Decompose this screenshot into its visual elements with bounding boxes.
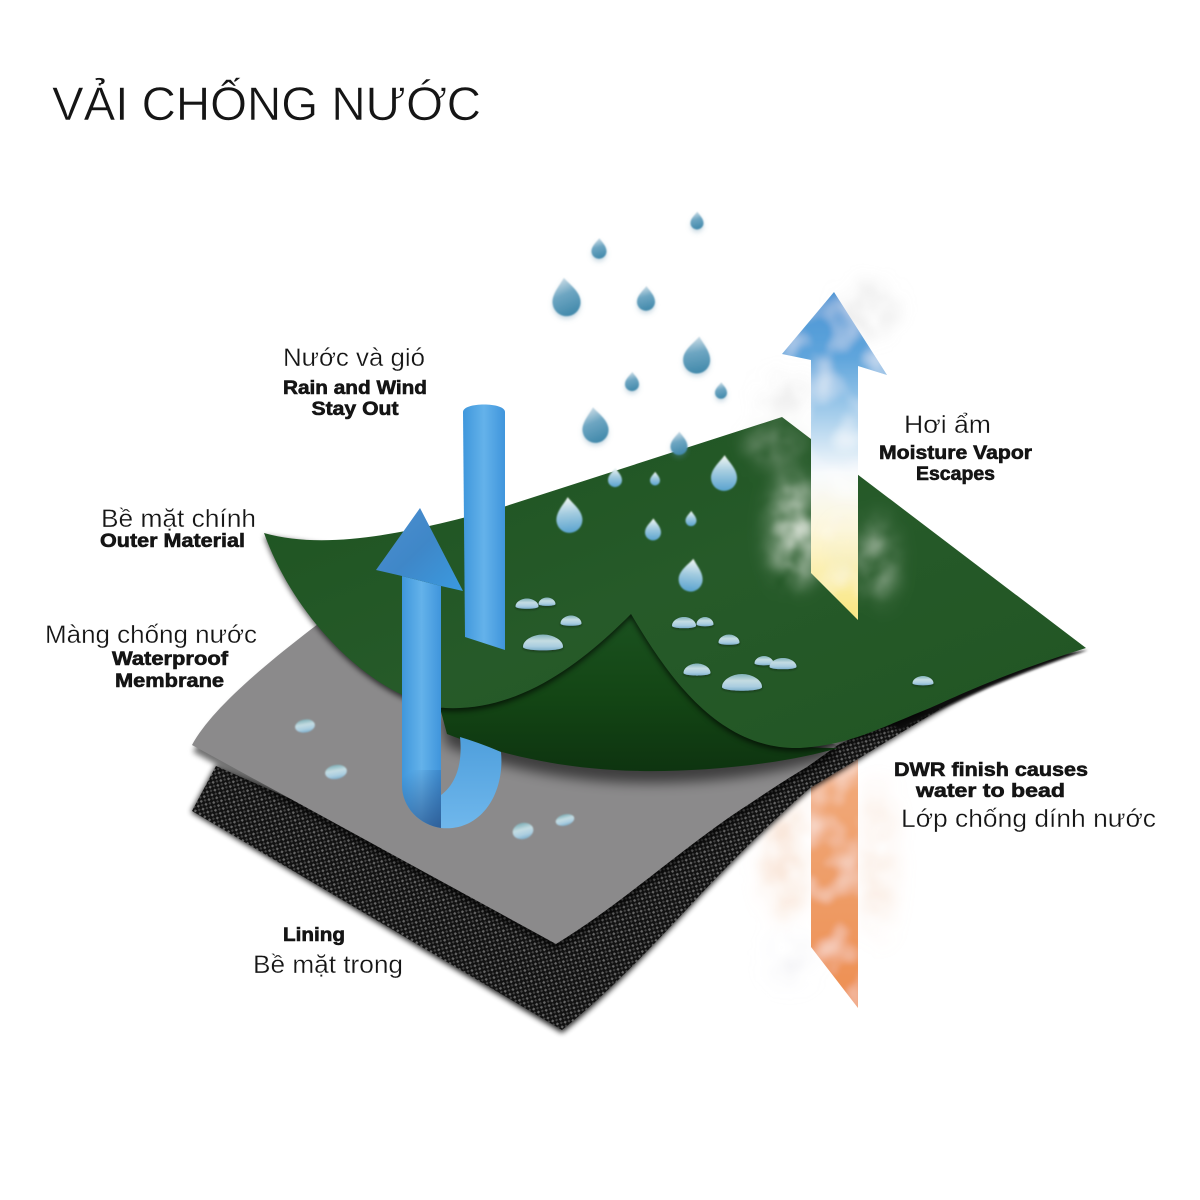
label: lining	[253, 925, 403, 979]
steam over vapor arrow	[833, 524, 857, 576]
label: rain and wind: Nước và gió	[283, 344, 425, 372]
fabric layer: waterproof membrane	[192, 624, 838, 950]
label: waterproof membrane: Màng chống nước	[45, 621, 257, 649]
orange heat haze	[761, 780, 894, 984]
arrow: orange heat beneath fabric	[811, 755, 858, 1008]
label: rain and wind: Stay Out	[312, 399, 399, 420]
label: DWR finish: DWR finish causes	[894, 760, 1088, 781]
label: waterproof membrane: Waterproof	[112, 649, 229, 670]
label: outer material: Bề mặt chính	[101, 505, 256, 533]
beaded water on outer material	[516, 598, 934, 691]
label: moisture vapor	[879, 411, 1033, 485]
label: waterproof membrane: Membrane	[115, 671, 224, 692]
fabric layer: outer material	[264, 417, 1086, 751]
steam behind vapor arrow	[747, 286, 896, 602]
falling water drops	[549, 212, 727, 455]
arrow: rain and wind stay out (deflected downward arrow)	[463, 404, 505, 650]
label: outer material: Outer Material	[100, 531, 245, 552]
arrow: water passing through membrane (J-shaped up arrow)	[376, 508, 501, 828]
arrow: moisture vapor escapes	[782, 292, 887, 620]
label: waterproof membrane	[45, 621, 257, 692]
label: lining: Bề mặt trong	[253, 951, 403, 979]
title: VẢI CHỐNG NƯỚC	[52, 77, 481, 130]
label: outer material	[100, 505, 256, 552]
label: rain and wind: Rain and Wind	[283, 378, 427, 399]
label: rain and wind	[283, 344, 427, 420]
label: moisture vapor: Moisture Vapor	[879, 443, 1033, 464]
shadow under outer material edge	[870, 650, 1088, 730]
label: lining: Lining	[283, 925, 345, 946]
label: moisture vapor: Escapes	[916, 464, 995, 485]
fabric layer: lining	[191, 675, 985, 1033]
beaded water on membrane	[294, 718, 576, 841]
label: DWR finish	[894, 760, 1156, 833]
water drops landing on outer material	[554, 455, 737, 593]
label: moisture vapor: Hơi ẩm	[904, 411, 991, 439]
label: DWR finish: water to bead	[915, 781, 1065, 802]
label: DWR finish: Lớp chống dính nước	[901, 805, 1156, 833]
fabric layer: curled underside of outer material	[440, 612, 838, 783]
